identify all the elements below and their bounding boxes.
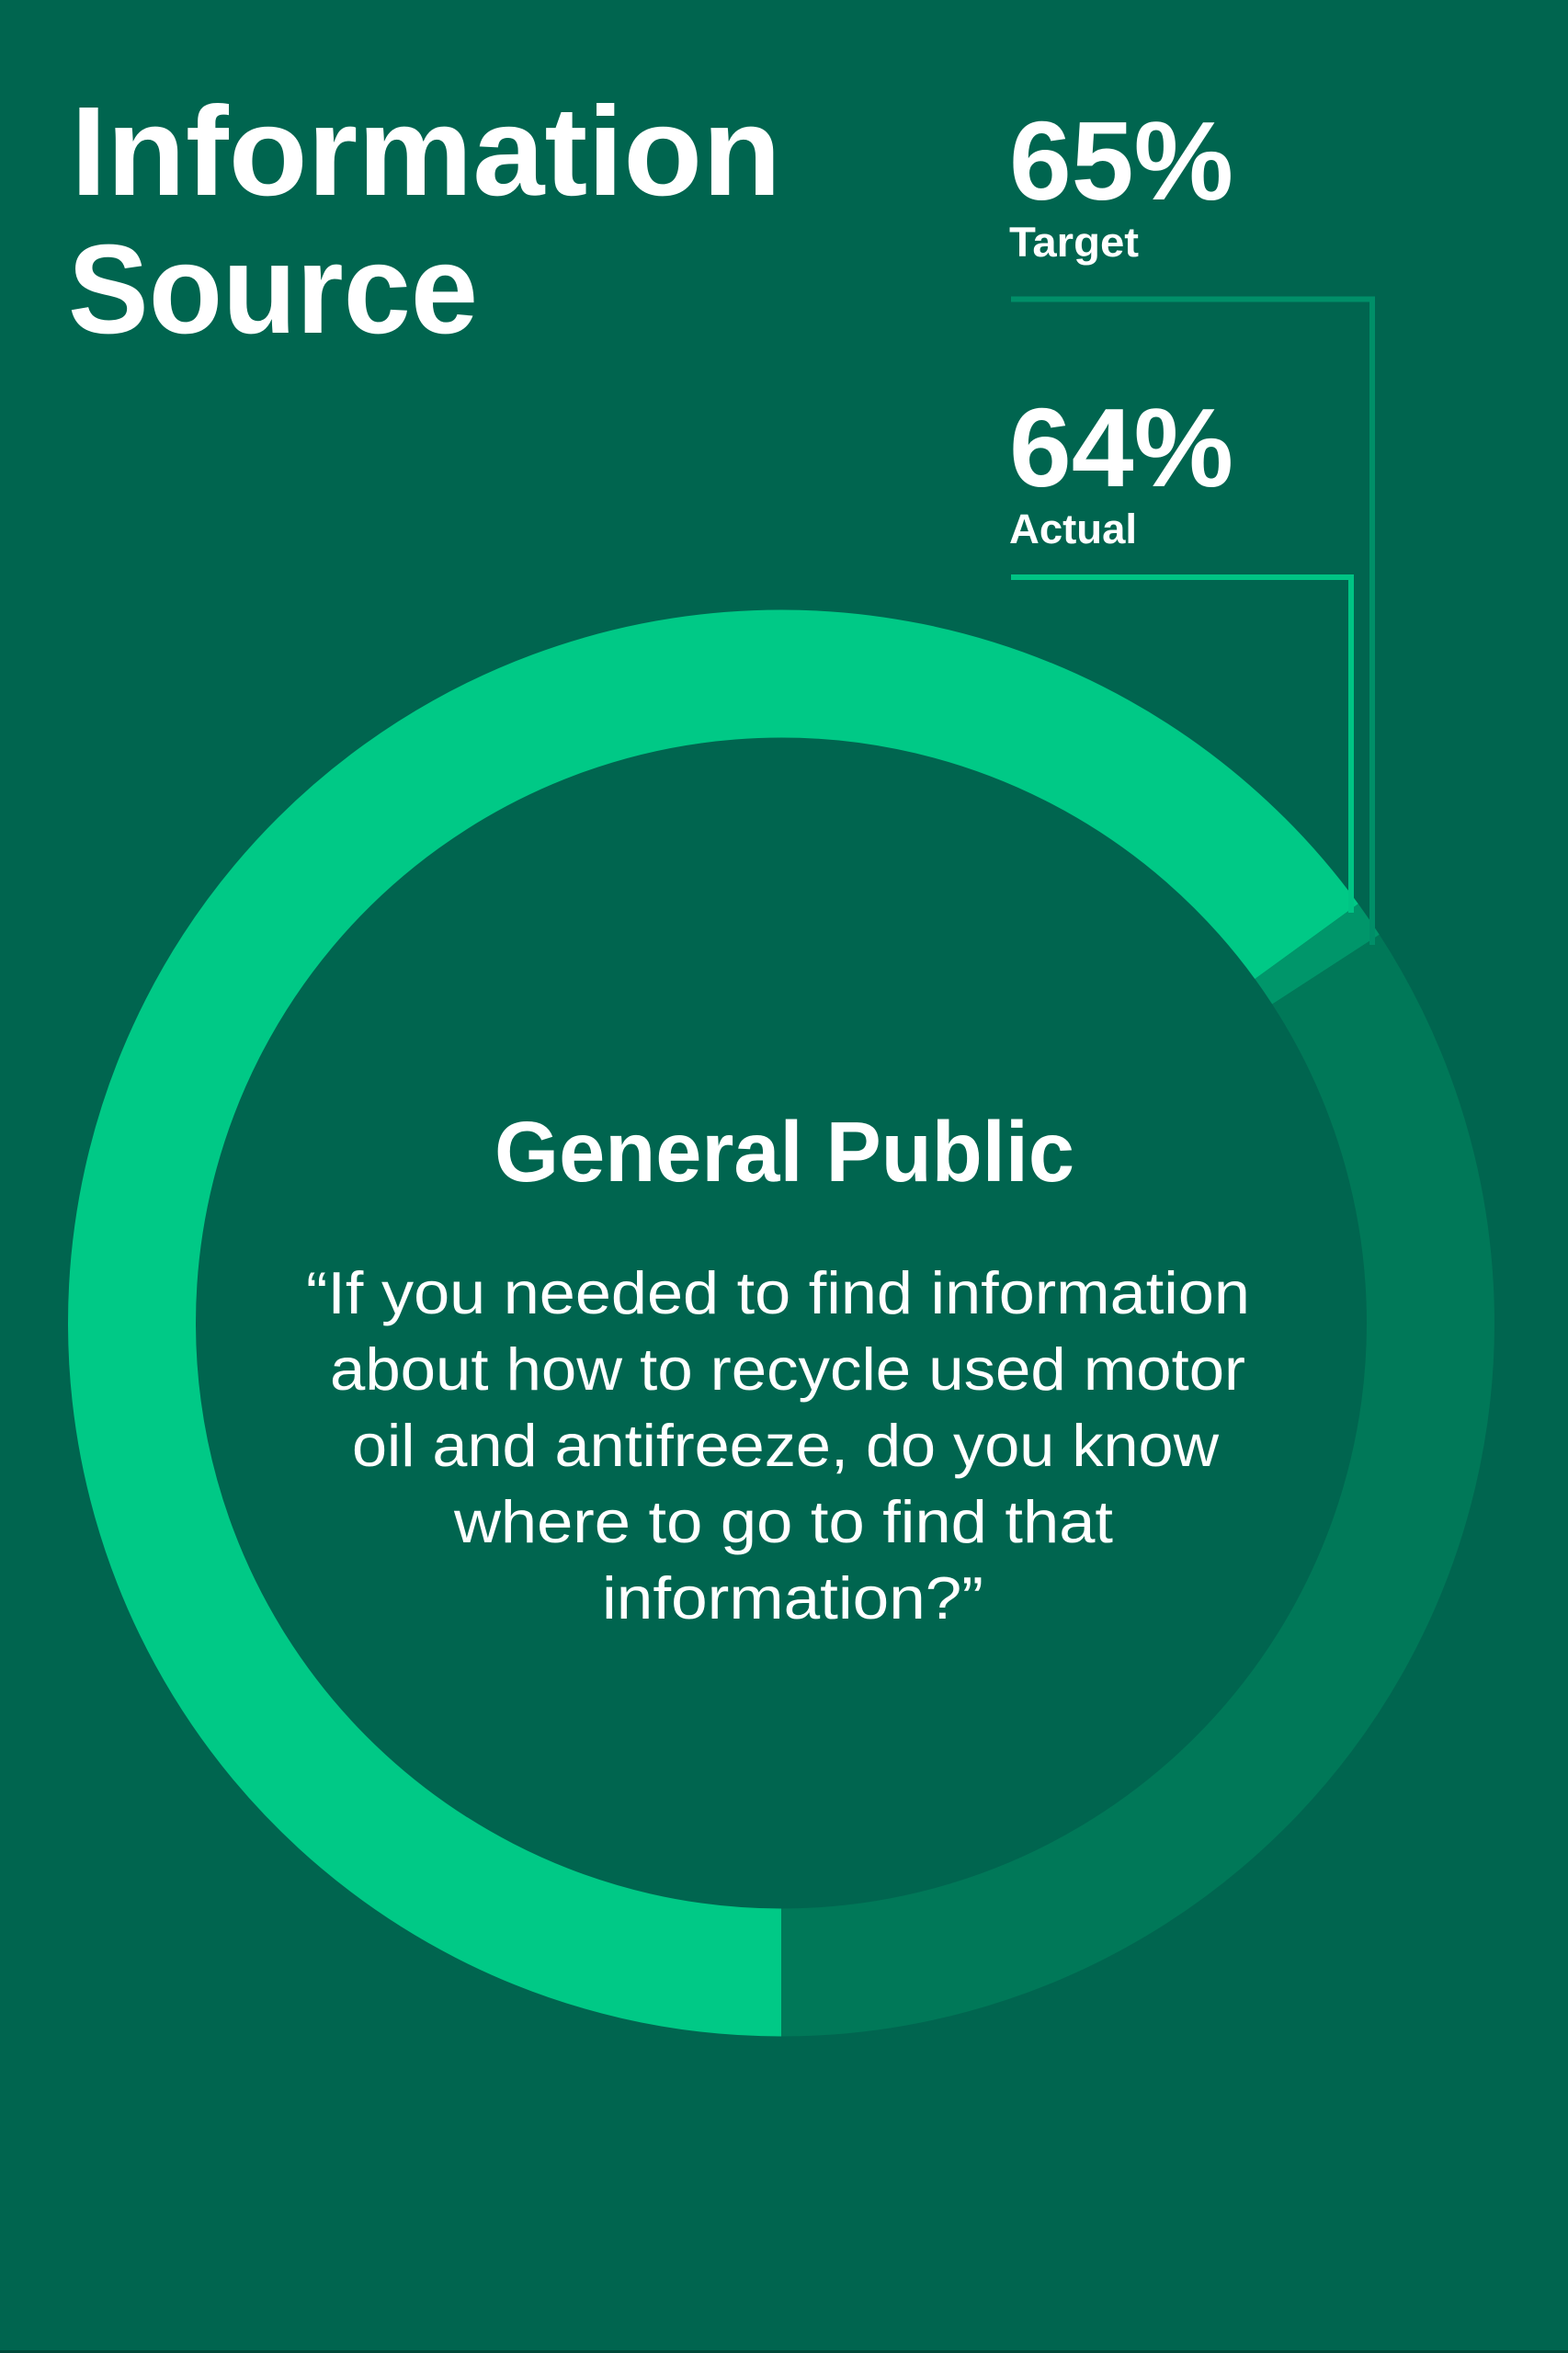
survey question: information?” [602,1564,983,1631]
survey question: “If you needed to find information [306,1259,1250,1326]
ring segment: actual 64% [131,674,1307,1972]
target stat: 65% [1009,98,1233,223]
title: Source [68,219,478,360]
survey question [306,1259,1250,1631]
donut chart: 64% actual, 65% target [131,674,1430,1972]
survey question: where to go to find that [453,1488,1113,1555]
target stat: Target [1009,219,1139,266]
actual stat: 64% [1009,385,1233,510]
title [68,81,781,360]
actual leader line [1011,577,1351,913]
center heading: General Public [494,1104,1074,1199]
target leader line [1011,300,1372,945]
survey question: oil and antifreeze, do you know [352,1412,1220,1479]
survey question: about how to recycle used motor [330,1336,1245,1403]
title: Information [71,81,781,222]
ring segment: remainder [781,970,1430,1972]
ring segment: gap to target [1307,941,1325,970]
actual stat: Actual [1009,506,1137,552]
